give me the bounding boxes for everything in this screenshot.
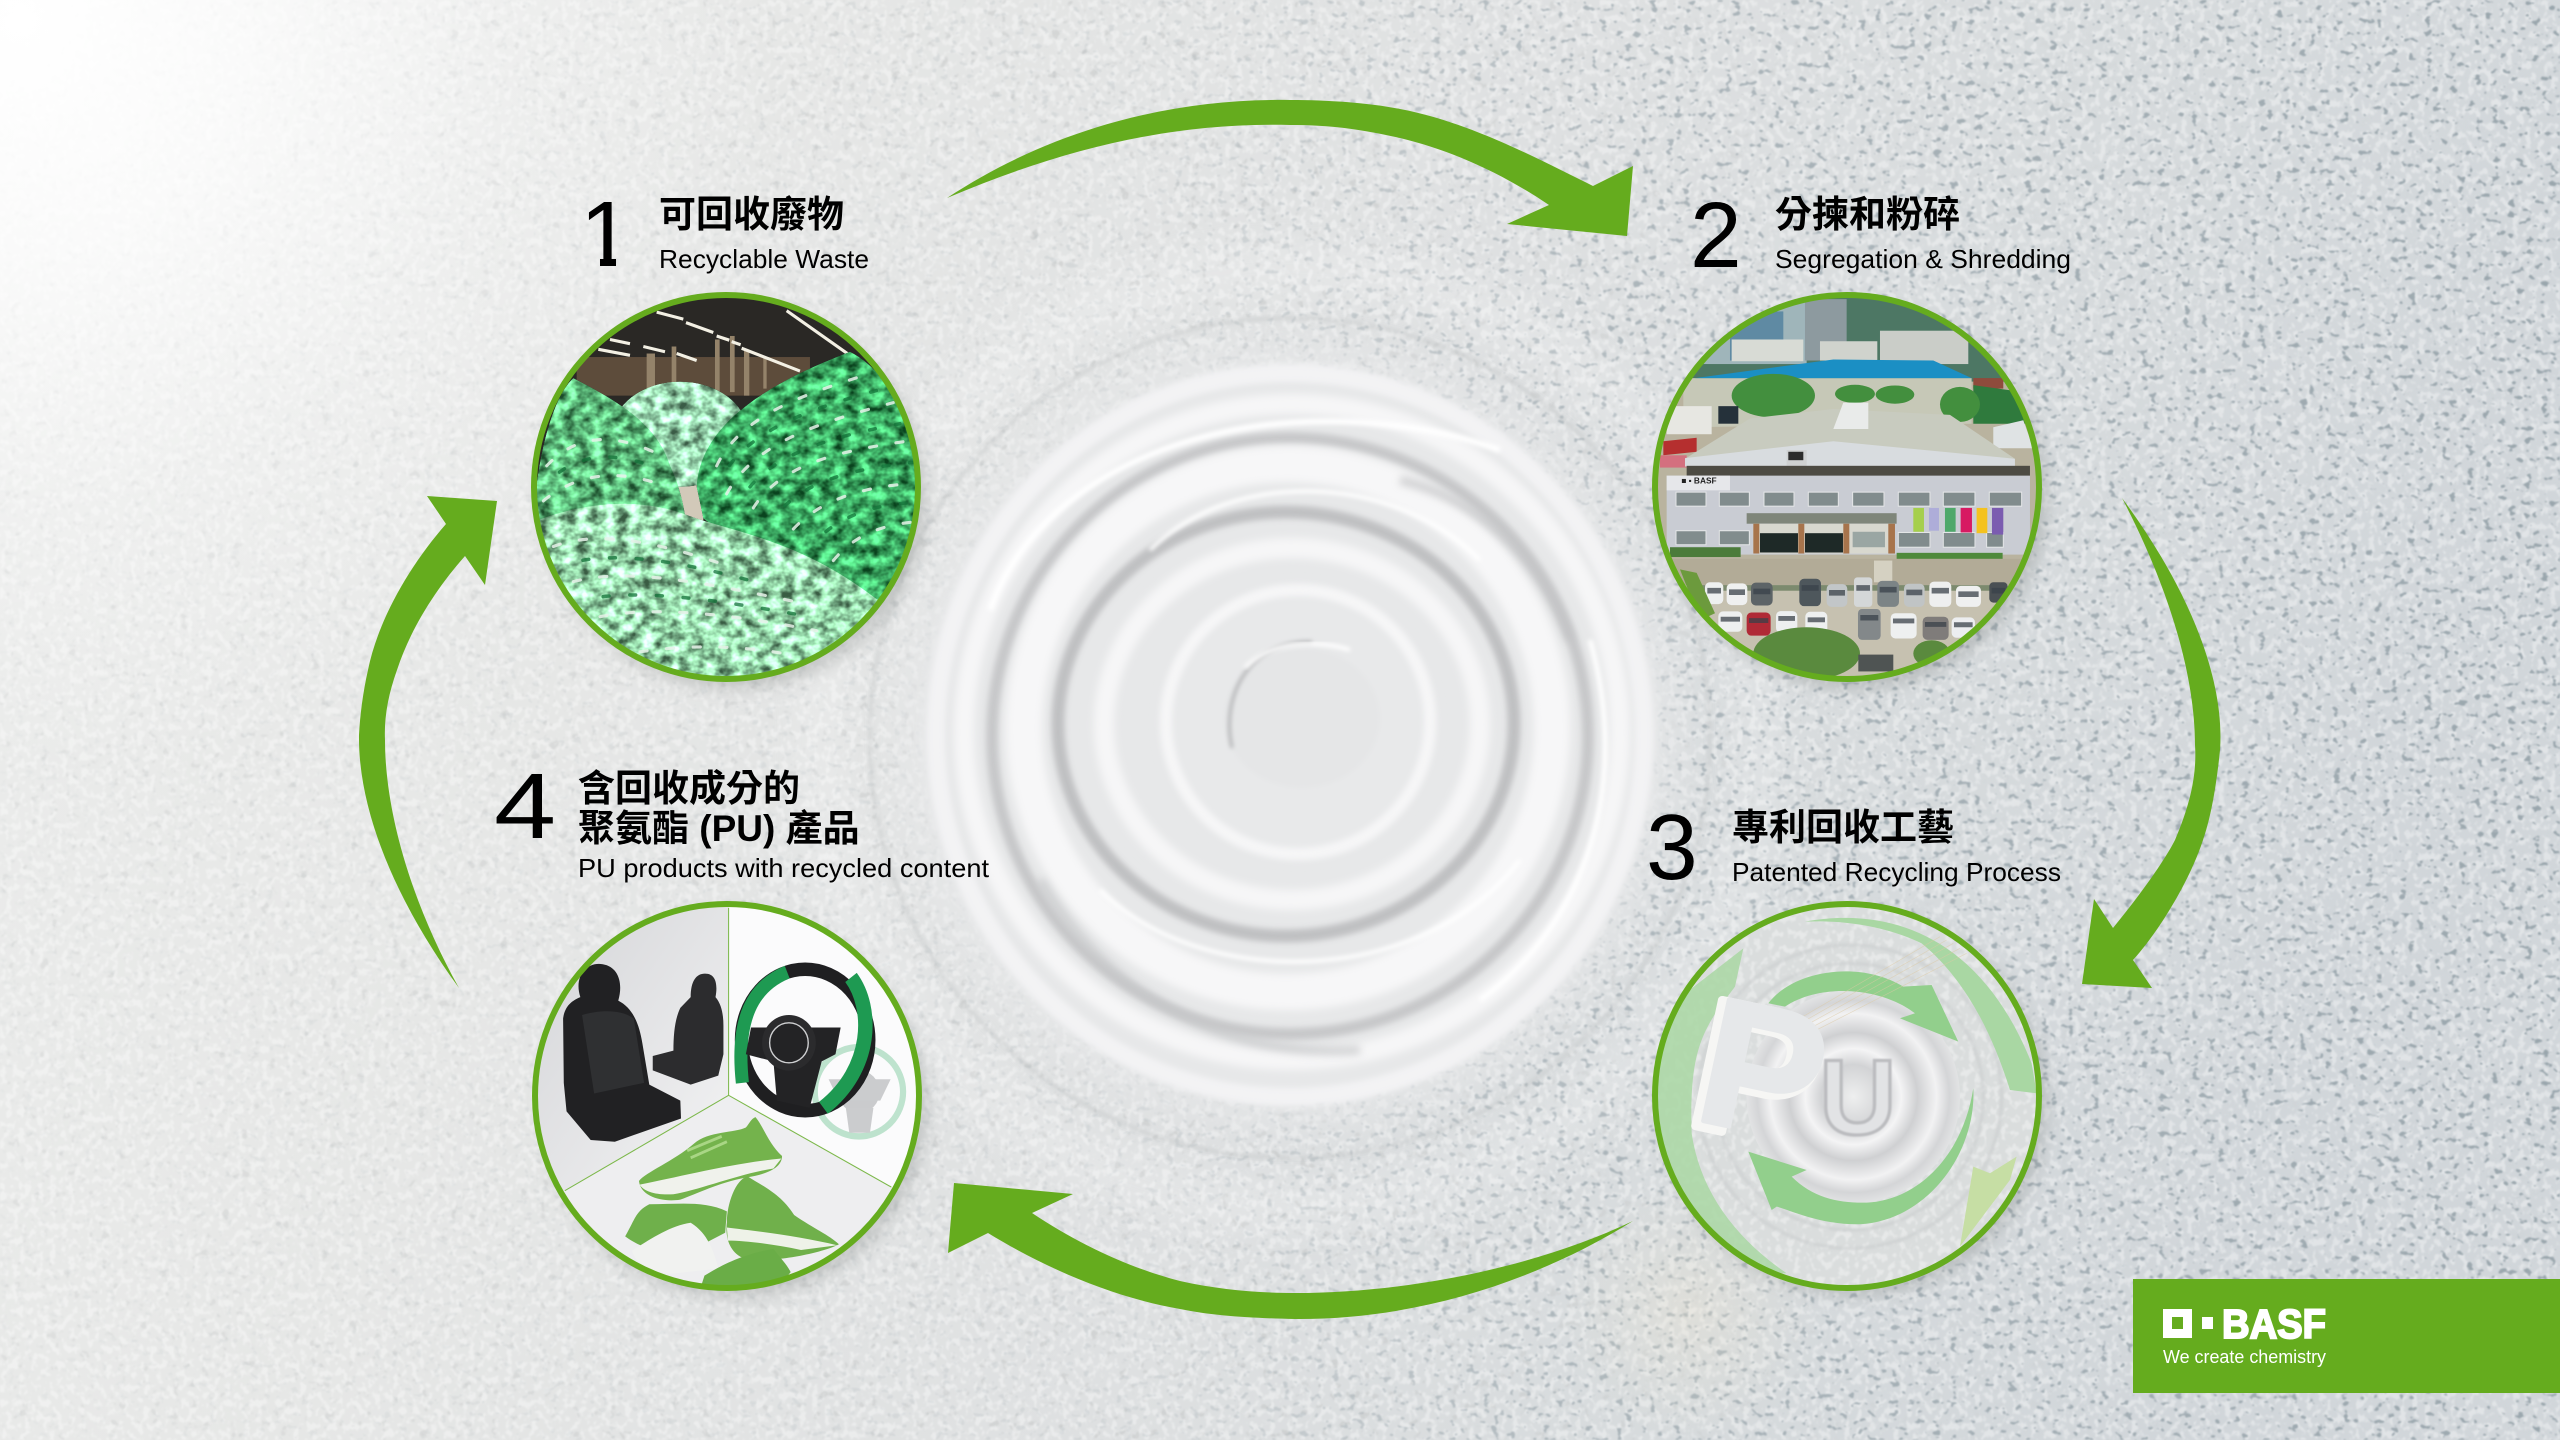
step 1 heading xyxy=(588,195,868,274)
circle 4: PU products photo collage xyxy=(522,894,935,1298)
step 2 heading: Segregation & Shredding xyxy=(1775,244,2071,274)
icon: BASF square mark xyxy=(2163,1309,2213,1338)
step 2 heading xyxy=(1690,183,2071,287)
step 2 heading: 分揀和粉碎 xyxy=(1775,194,1960,235)
step 4 heading: 聚氨酯 (PU) 產品 xyxy=(578,808,860,849)
step 1 heading: 1 xyxy=(580,182,632,286)
swirl xyxy=(1747,990,1960,1203)
centre ripple xyxy=(820,268,1760,1208)
step 1 heading: Recyclable Waste xyxy=(659,244,869,274)
circle 3: patented recycling process illustration: U xyxy=(1819,1037,1896,1157)
shoes xyxy=(522,1095,935,1297)
inner green cycle arrows xyxy=(1748,971,1973,1224)
step 4 heading: PU products with recycled content xyxy=(578,853,990,883)
arrow: step 2 to step 3 xyxy=(2082,498,2220,988)
step 1 heading: 可回收廢物 xyxy=(659,194,844,235)
step 3 heading: 3 xyxy=(1646,795,1698,899)
BASF logo block: BASF xyxy=(2222,1301,2326,1347)
step 3 heading: Patented Recycling Process xyxy=(1732,857,2061,887)
circle 2: recycling plant photo: ■ ▪ BASF xyxy=(1681,477,1717,486)
circle 3: patented recycling process illustration: P xyxy=(1684,960,1843,1181)
car seats xyxy=(538,907,728,1190)
steering wheels xyxy=(729,897,935,1201)
circle 3: patented recycling process illustration: P xyxy=(1675,958,1840,1188)
circle 2: recycling plant photo xyxy=(1650,290,2047,689)
step 4 heading: 含回收成分的 xyxy=(578,768,800,809)
step 3 heading: 專利回收工藝 xyxy=(1732,807,1954,848)
circle 1: recyclable waste photo xyxy=(530,290,926,690)
circle 3: patented recycling process illustration xyxy=(1650,900,2050,1300)
BASF logo block: We create chemistry xyxy=(2163,1347,2326,1367)
step 3 heading xyxy=(1646,795,2061,899)
BASF logo block xyxy=(2133,1279,2560,1393)
arrow: step 4 to step 1 xyxy=(359,496,497,988)
step 2 heading: 2 xyxy=(1690,183,1742,287)
arrow: step 3 to step 4 xyxy=(948,1183,1633,1319)
arrow: step 1 to step 2 xyxy=(947,100,1633,236)
step 4 heading: 4 xyxy=(494,754,556,858)
step 4 heading xyxy=(494,754,990,883)
outer green cycle arrows xyxy=(1657,918,2037,1273)
